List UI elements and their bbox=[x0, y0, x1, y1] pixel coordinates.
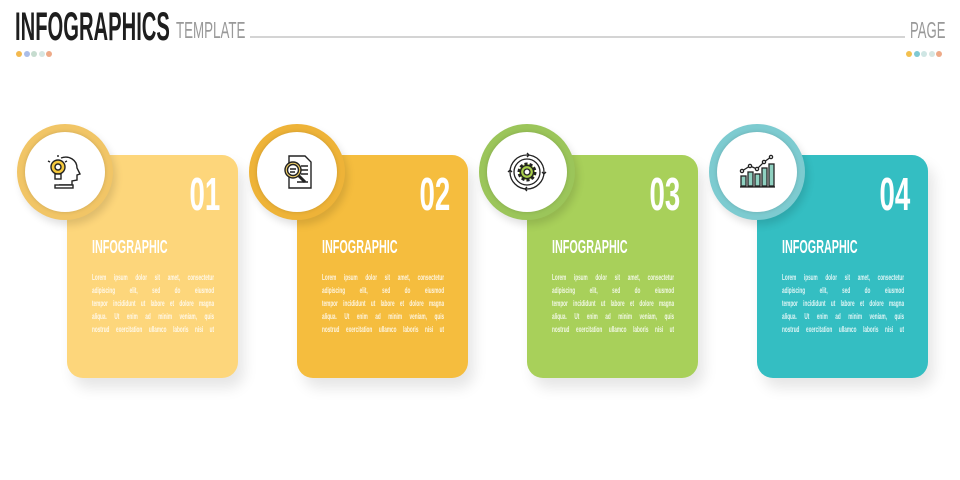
body text: aliqua. Ut enim ad minim veniam, quis bbox=[552, 311, 674, 321]
heading: INFOGRAPHIC bbox=[782, 237, 858, 257]
icon: document with magnifier bbox=[249, 124, 345, 220]
body text: Lorem ipsum dolor sit amet, consectetur bbox=[552, 272, 674, 282]
page label: PAGE bbox=[910, 17, 945, 43]
body text: aliqua. Ut enim ad minim veniam, quis bbox=[92, 311, 214, 321]
panel: card 01 bbox=[67, 155, 238, 378]
dots left bbox=[16, 51, 52, 57]
body text: tempor incididunt ut labore et dolore magna bbox=[782, 298, 904, 308]
body text: nostrud exercitation ullamco laboris nisi ut bbox=[782, 324, 904, 334]
body text: aliqua. Ut enim ad minim veniam, quis bbox=[782, 311, 904, 321]
header line bbox=[250, 36, 905, 38]
panel: card 03 bbox=[527, 155, 698, 378]
heading: INFOGRAPHIC bbox=[552, 237, 628, 257]
panel: card 02 bbox=[297, 155, 468, 378]
panel: card 04 bbox=[757, 155, 928, 378]
body text: tempor incididunt ut labore et dolore magna bbox=[92, 298, 214, 308]
body text bbox=[552, 272, 674, 334]
body text bbox=[782, 272, 904, 334]
number 01: 01 bbox=[189, 168, 220, 220]
header title: INFOGRAPHICS bbox=[15, 5, 170, 49]
body text: Lorem ipsum dolor sit amet, consectetur bbox=[322, 272, 444, 282]
heading: INFOGRAPHIC bbox=[92, 237, 168, 257]
heading: INFOGRAPHIC bbox=[322, 237, 398, 257]
icon: head with lightbulb bbox=[17, 124, 113, 220]
number 04: 04 bbox=[879, 168, 910, 220]
body text: adipiscing elit, sed do eiusmod bbox=[782, 285, 904, 295]
icon: gear with cycle arrows bbox=[479, 124, 575, 220]
header subtitle: TEMPLATE bbox=[176, 17, 245, 43]
icon: bar chart with trend line bbox=[709, 124, 805, 220]
number 03: 03 bbox=[649, 168, 680, 220]
body text: Lorem ipsum dolor sit amet, consectetur bbox=[782, 272, 904, 282]
body text: adipiscing elit, sed do eiusmod bbox=[322, 285, 444, 295]
body text: adipiscing elit, sed do eiusmod bbox=[92, 285, 214, 295]
body text bbox=[92, 272, 214, 334]
body text: adipiscing elit, sed do eiusmod bbox=[552, 285, 674, 295]
body text bbox=[322, 272, 444, 334]
body text: Lorem ipsum dolor sit amet, consectetur bbox=[92, 272, 214, 282]
body text: tempor incididunt ut labore et dolore magna bbox=[322, 298, 444, 308]
body text: tempor incididunt ut labore et dolore magna bbox=[552, 298, 674, 308]
body text: nostrud exercitation ullamco laboris nisi ut bbox=[92, 324, 214, 334]
number 02: 02 bbox=[419, 168, 450, 220]
body text: aliqua. Ut enim ad minim veniam, quis bbox=[322, 311, 444, 321]
body text: nostrud exercitation ullamco laboris nisi ut bbox=[322, 324, 444, 334]
body text: nostrud exercitation ullamco laboris nisi ut bbox=[552, 324, 674, 334]
dots right bbox=[906, 51, 942, 57]
